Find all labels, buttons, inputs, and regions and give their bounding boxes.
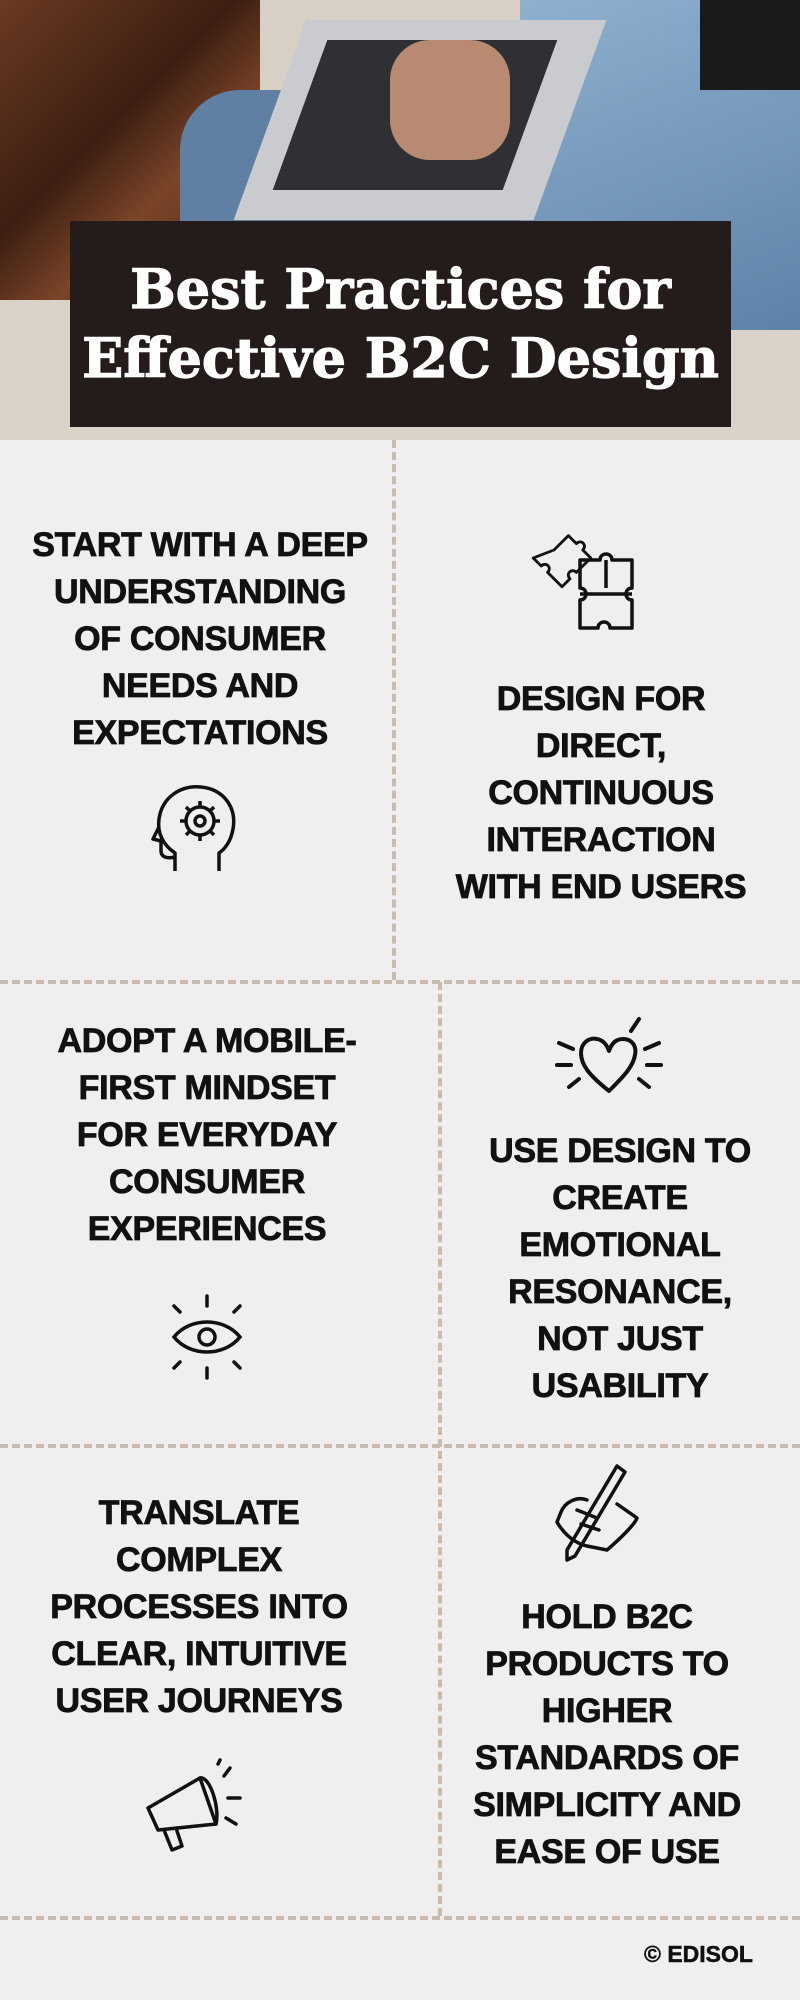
text: consumer needs: START WITH A DEEP <box>32 526 368 564</box>
text: direct interaction: DIRECT, <box>536 727 666 765</box>
text: mobile first: FIRST MINDSET <box>79 1069 335 1107</box>
text: mobile first: CONSUMER <box>109 1163 305 1201</box>
text: mobile first <box>58 1022 356 1248</box>
text: mobile first: EXPERIENCES <box>88 1210 326 1248</box>
text: emotional resonance: USABILITY <box>532 1367 708 1405</box>
text: user journeys: USER JOURNEYS <box>55 1682 343 1720</box>
text: user journeys: COMPLEX <box>116 1541 282 1579</box>
text: higher standards: PRODUCTS TO <box>485 1645 729 1683</box>
text: emotional resonance: RESONANCE, <box>508 1273 732 1311</box>
text: direct interaction <box>455 680 746 906</box>
text: higher standards: STANDARDS OF <box>475 1739 739 1777</box>
text: consumer needs: UNDERSTANDING <box>54 573 346 611</box>
text: higher standards: HIGHER <box>542 1692 672 1730</box>
text: mobile first: FOR EVERYDAY <box>77 1116 337 1154</box>
footer credit: © EDISOL <box>644 1941 753 1967</box>
text: higher standards: EASE OF USE <box>494 1833 720 1871</box>
text: direct interaction: CONTINUOUS <box>488 774 714 812</box>
text: emotional resonance: NOT JUST <box>537 1320 703 1358</box>
text: consumer needs: NEEDS AND <box>102 667 298 705</box>
text: consumer needs: OF CONSUMER <box>74 620 326 658</box>
text: consumer needs <box>32 526 368 752</box>
text: emotional resonance: USE DESIGN TO <box>489 1132 751 1170</box>
text: user journeys <box>50 1494 348 1720</box>
text: emotional resonance <box>489 1132 751 1405</box>
icon: megaphone <box>146 1758 242 1852</box>
text: direct interaction: INTERACTION <box>486 821 716 859</box>
text: higher standards: HOLD B2C <box>521 1598 693 1636</box>
text: higher standards: SIMPLICITY AND <box>473 1786 741 1824</box>
title box: Effective B2C Design <box>82 326 719 390</box>
header photo <box>0 0 800 440</box>
text: emotional resonance: EMOTIONAL <box>519 1226 721 1264</box>
text: higher standards <box>473 1598 741 1871</box>
icon: heart <box>555 1016 663 1094</box>
title box: Best Practices for <box>130 257 671 321</box>
text: direct interaction: WITH END USERS <box>456 868 746 906</box>
text: user journeys: CLEAR, INTUITIVE <box>51 1635 347 1673</box>
icon: brain head <box>151 785 236 871</box>
text: user journeys: PROCESSES INTO <box>50 1588 348 1626</box>
icon: eye <box>172 1294 242 1380</box>
text: mobile first: ADOPT A MOBILE- <box>58 1022 356 1060</box>
text: direct interaction: DESIGN FOR <box>497 680 705 718</box>
icon: puzzle <box>532 534 634 630</box>
text: emotional resonance: CREATE <box>552 1179 688 1217</box>
icon: hand with pencil <box>555 1464 639 1562</box>
text: consumer needs: EXPECTATIONS <box>72 714 328 752</box>
text: user journeys: TRANSLATE <box>99 1494 299 1532</box>
title box <box>70 221 731 427</box>
